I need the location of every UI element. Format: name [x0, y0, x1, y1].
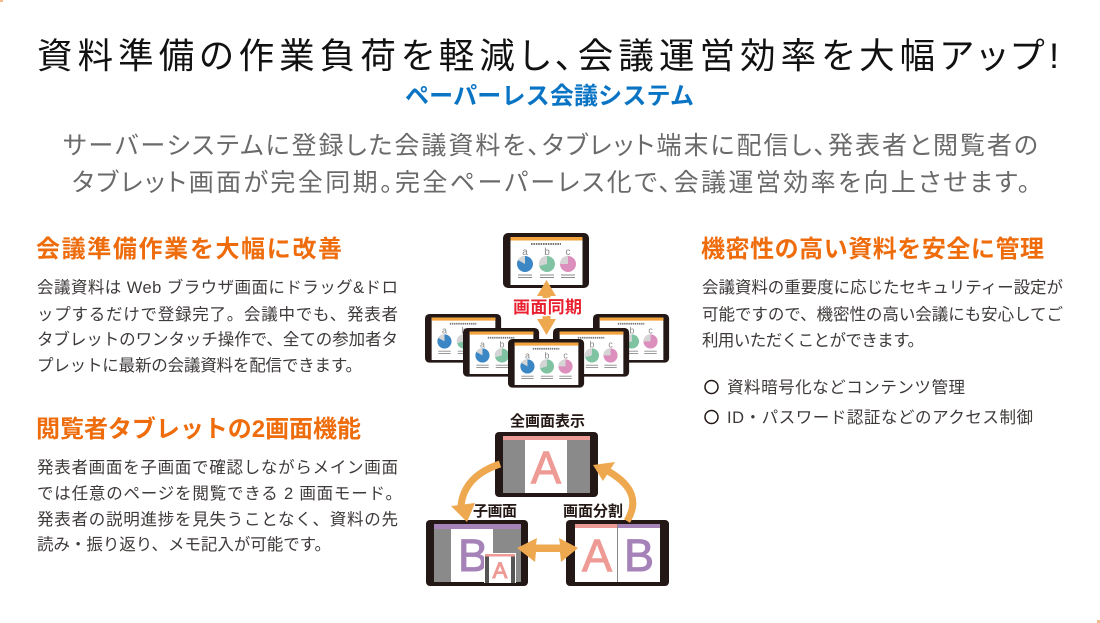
- intro text: [63, 132, 1038, 197]
- label: split screen: 画面分割: [563, 503, 623, 520]
- tablet: full screen: [495, 432, 598, 497]
- tablet: presenter: [503, 233, 589, 288]
- list: security features: ID・パスワード認証などのアクセス制御: [727, 408, 1033, 427]
- tablet: mid right: [553, 328, 629, 377]
- intro text: サーバーシステムに登録した会議資料を、タブレット端末に配信し、発表者と閲覧者の: [63, 132, 1038, 160]
- diagram: two-screen modes: [426, 412, 669, 586]
- tablet: child screen: A: [493, 558, 508, 583]
- text block: meeting preparation: [37, 277, 398, 375]
- text block: two-screen function: [37, 458, 402, 554]
- list: security features: [705, 378, 1033, 427]
- text block: two-screen function: 発表者画面を子画面で確認しながらメイン画面: [37, 458, 398, 477]
- label: full screen: 全画面表示: [510, 412, 585, 430]
- text block: meeting preparation: 会議資料は Web ブラウザ画面にドラッグ&ドロ: [37, 277, 398, 297]
- tablet: split screen: B: [624, 530, 654, 581]
- label: child screen: 子画面: [473, 503, 517, 520]
- text block: security: [702, 278, 1064, 350]
- tablet: full screen: A: [531, 442, 561, 493]
- diagram: screen sync: [425, 233, 669, 388]
- list: security features: 資料暗号化などコンテンツ管理: [727, 378, 965, 397]
- label: screen sync: 画面同期: [513, 298, 582, 317]
- heading: security: 機密性の高い資料を安全に管理: [701, 236, 1044, 263]
- title: 資料準備の作業負荷を軽減し、会議運営効率を大幅アップ!: [37, 36, 1059, 76]
- intro text: タブレット画面が完全同期。完全ペーパーレス化で、会議運営効率を向上させます。: [72, 169, 1030, 197]
- tablet: center: [508, 339, 584, 388]
- text block: meeting preparation: プレットに最新の会議資料を配信できます。: [37, 356, 362, 375]
- heading: meeting preparation: 会議準備作業を大幅に改善: [36, 236, 342, 263]
- text block: two-screen function: では任意のページを閲覧できる 2 画面モード。: [37, 484, 402, 503]
- tablet: child screen: [426, 520, 528, 586]
- heading: two-screen function: 閲覧者タブレットの2画面機能: [36, 415, 361, 443]
- subtitle: ペーパーレス会議システム: [405, 83, 694, 110]
- corner mark: bottom right: [1097, 620, 1100, 623]
- arrow: child and split: [517, 538, 578, 562]
- text block: two-screen function: 発表者の説明進捗を見失うことなく、資料の先: [37, 510, 398, 529]
- corner mark: top left: [0, 0, 3, 2]
- arrow: split to full: [593, 462, 633, 521]
- text block: two-screen function: 読み・振り返り、メモ記入が可能です。: [37, 535, 331, 554]
- text block: meeting preparation: タブレットのワンタッチ操作で、全ての参加者タ: [37, 329, 398, 349]
- tablet: split screen: A: [582, 530, 612, 581]
- arrow: full to child: [451, 464, 500, 522]
- text block: security: 会議資料の重要度に応じたセキュリティー設定が: [702, 278, 1064, 297]
- tablet: far right: [593, 314, 669, 363]
- tablet: split screen: [566, 520, 669, 586]
- tablet: child screen: B: [458, 530, 488, 581]
- text block: meeting preparation: ップするだけで登録完了。会議中でも、発表者: [37, 305, 398, 324]
- tablet: mid left: [463, 328, 539, 377]
- arrow: sync: [537, 280, 556, 335]
- text block: security: 利用いただくことができます。: [702, 331, 924, 350]
- tablet: far left: [425, 314, 501, 363]
- text block: security: 可能ですので、機密性の高い会議にも安心してご: [702, 305, 1064, 324]
